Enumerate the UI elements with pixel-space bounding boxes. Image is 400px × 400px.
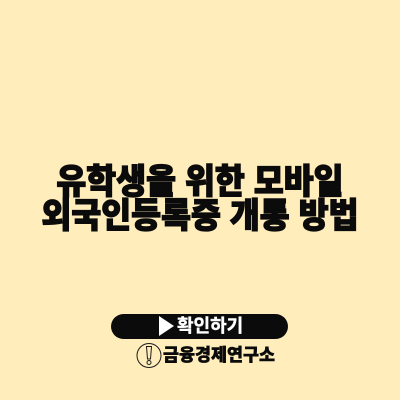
brand: [136, 343, 275, 368]
button label: 확인하기: [177, 316, 243, 336]
title line 2: 외국인등록증 개통 방법: [41, 197, 359, 235]
icon: play triangle: [159, 316, 174, 336]
title: [41, 163, 359, 235]
brand name: 금융경제연구소: [163, 345, 275, 365]
button: [111, 314, 288, 339]
icon: exclamation circle: [136, 343, 162, 368]
title line 1: 유학생을 위한 모바일: [56, 163, 344, 201]
